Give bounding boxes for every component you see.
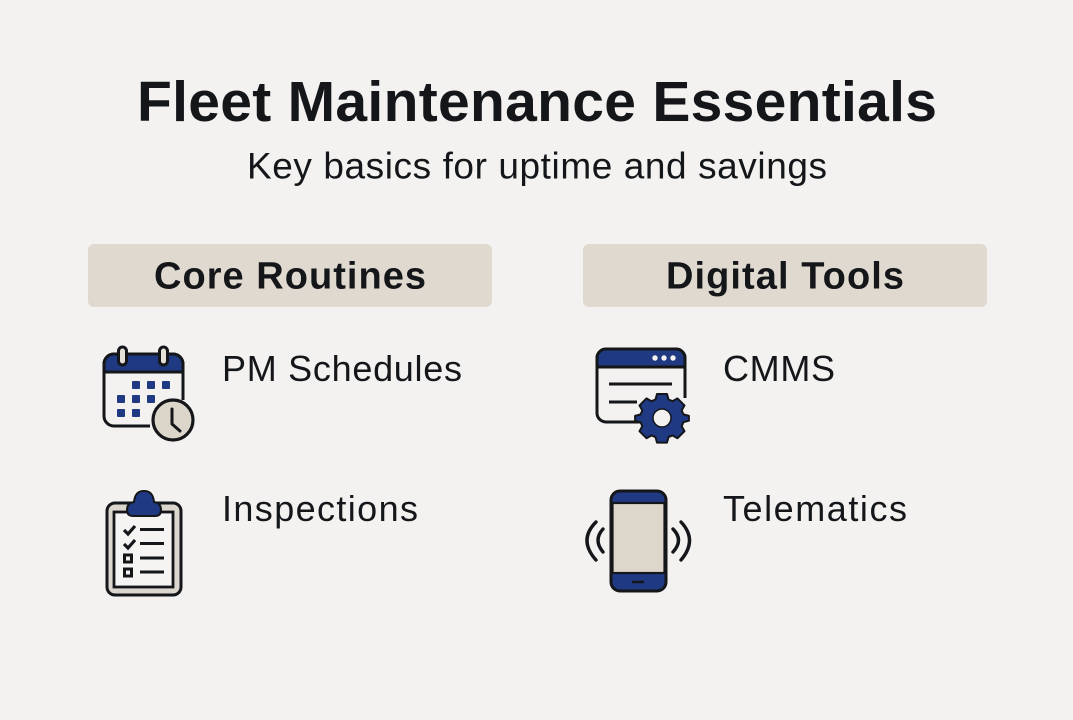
title: Fleet Maintenance Essentials: [137, 70, 937, 134]
heading: core routines: Core Routines: [154, 256, 426, 298]
icon: calendar with clock: [104, 347, 193, 440]
icon: smartphone with signal waves: [587, 491, 690, 591]
panel: core routines: [88, 244, 492, 595]
label: Inspections: Inspections: [222, 488, 418, 529]
label: PM Schedules: PM Schedules: [222, 348, 462, 389]
label: CMMS: CMMS: [723, 348, 835, 389]
heading: digital tools: Digital Tools: [666, 256, 904, 298]
subtitle: Key basics for uptime and savings: [247, 146, 827, 186]
label: Telematics: Telematics: [723, 488, 907, 529]
icon: software window with gear: [597, 349, 689, 443]
icon: clipboard checklist: [107, 491, 181, 595]
heading: digital tools: [583, 244, 987, 307]
panel: digital tools: [583, 244, 987, 591]
heading: core routines: [88, 244, 492, 307]
